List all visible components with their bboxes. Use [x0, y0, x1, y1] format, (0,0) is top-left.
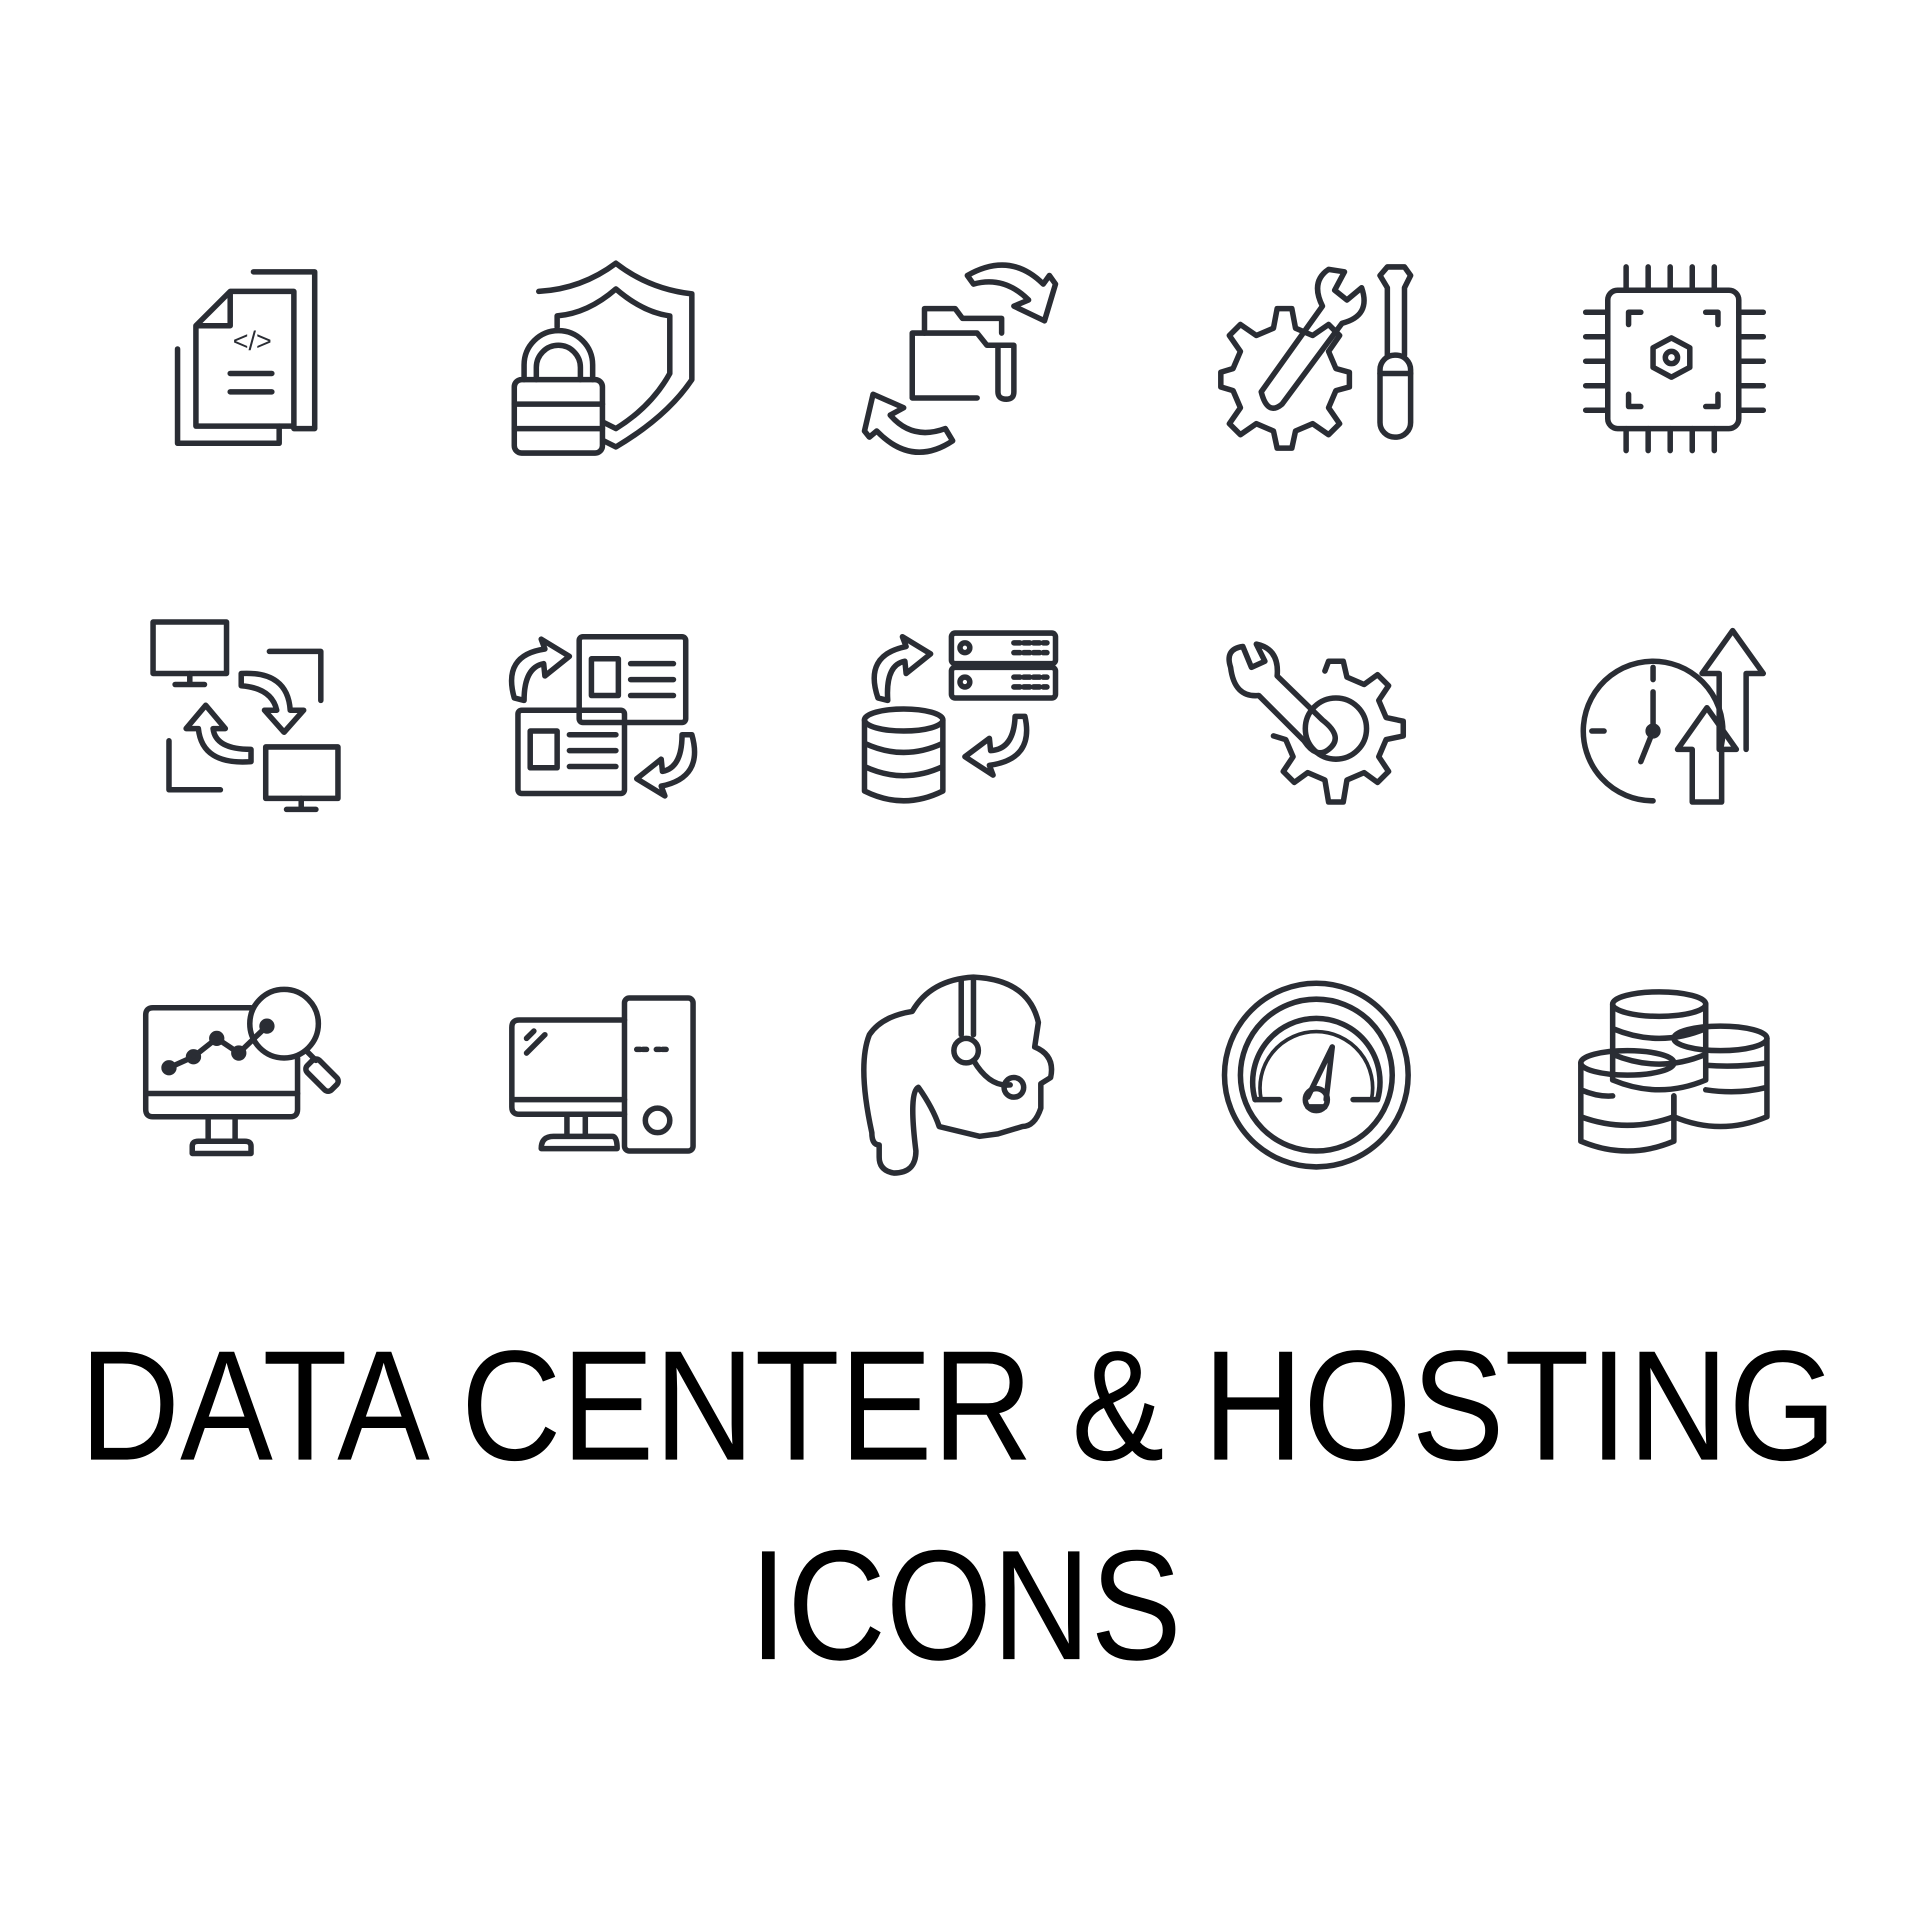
icon: shield with lock	[514, 263, 692, 453]
icon: coin stacks	[1581, 992, 1767, 1151]
icon: server database sync	[864, 633, 1056, 801]
icon: clock growth	[1583, 631, 1763, 802]
icon: computer network sync	[153, 622, 338, 809]
icon: code documents	[178, 272, 315, 443]
icon: speedometer	[1224, 983, 1408, 1167]
icon: processor chip	[1586, 267, 1763, 451]
icon: gear wrench screwdriver	[1221, 267, 1411, 448]
icon: folder sync	[864, 265, 1056, 452]
icon: support agent	[864, 977, 1052, 1173]
title	[80, 1319, 1837, 1693]
icon: desktop computer	[512, 998, 693, 1151]
icon: monitor analytics	[146, 989, 340, 1153]
icon: cards exchange	[512, 637, 695, 796]
title: ICONS	[749, 1518, 1182, 1693]
icon: gear with wrench	[1229, 644, 1403, 802]
icon: code documents: </>	[233, 326, 272, 356]
